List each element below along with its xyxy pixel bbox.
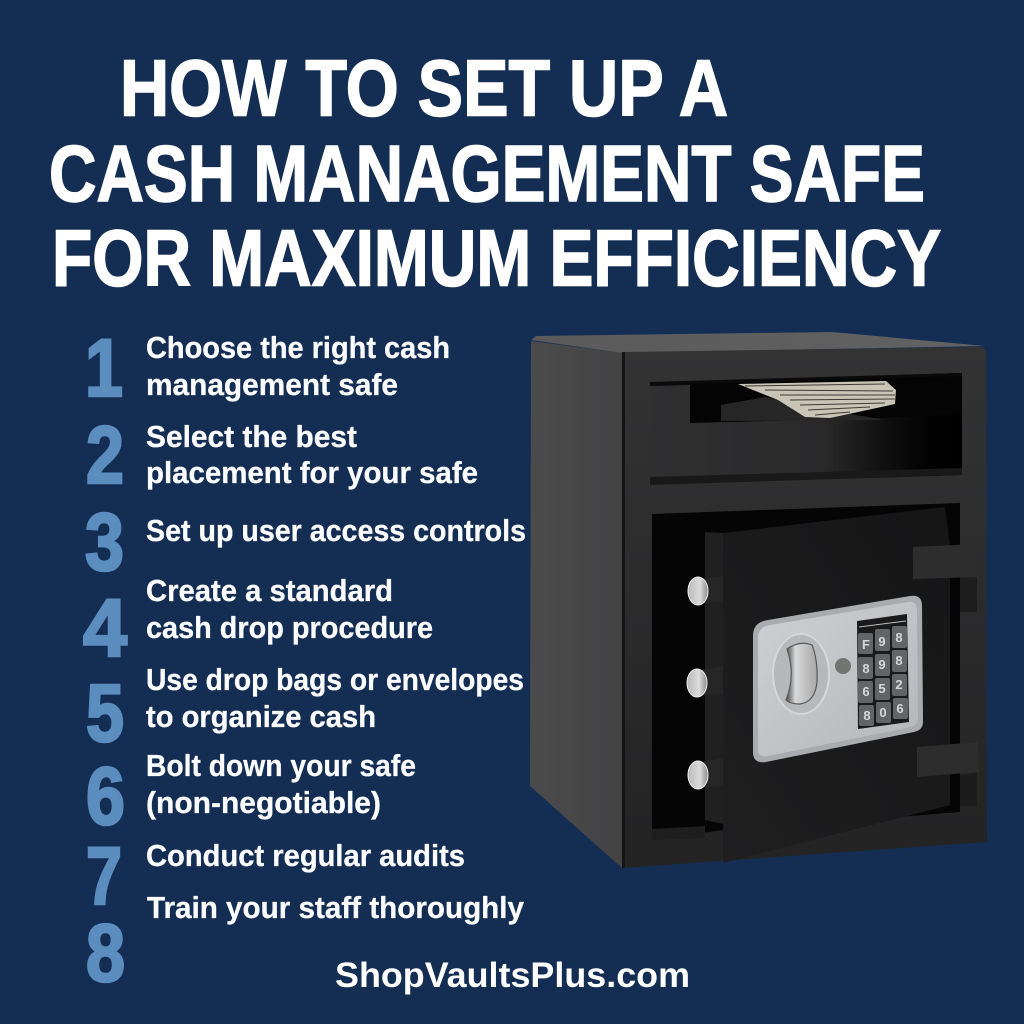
keypad key labels: 8 xyxy=(895,630,903,645)
step 5 xyxy=(86,663,524,759)
indicator light xyxy=(835,658,851,674)
step 5: Use drop bags or envelopes xyxy=(146,663,524,697)
door edge xyxy=(705,532,723,824)
keypad key labels: 8 xyxy=(862,661,870,676)
cash stack xyxy=(738,381,896,418)
step 1: Choose the right cash xyxy=(146,331,450,365)
locking bolt: top xyxy=(688,576,723,605)
electronic lock plate xyxy=(753,596,923,762)
step 2 xyxy=(86,410,478,501)
step 1: 1 xyxy=(85,323,123,414)
locking bolt: middle xyxy=(687,666,723,697)
illustration: cash management safe xyxy=(530,332,987,868)
keypad key labels: 9 xyxy=(878,634,886,649)
website footer: ShopVaultsPlus.com xyxy=(335,956,690,995)
handle recess xyxy=(773,634,829,714)
door xyxy=(723,507,950,863)
safe front face xyxy=(622,347,987,868)
numbered steps list xyxy=(83,323,526,999)
step 6 xyxy=(86,749,416,842)
keypad key labels: 5 xyxy=(878,681,886,696)
keypad key labels: 9 xyxy=(878,657,886,672)
title xyxy=(49,44,941,302)
keypad key labels: 6 xyxy=(896,701,904,716)
keypad key labels: 0 xyxy=(879,705,887,720)
step 3: Set up user access controls xyxy=(146,514,526,548)
step 8 xyxy=(86,891,524,999)
keypad key labels: 8 xyxy=(863,708,871,723)
locking bolt: bottom xyxy=(688,758,723,789)
lower opening xyxy=(652,503,960,840)
step 1 xyxy=(85,323,450,414)
step 8: 8 xyxy=(86,908,125,999)
keypad xyxy=(857,614,909,729)
step 2: placement for your safe xyxy=(146,456,478,490)
keypad key labels: 8 xyxy=(895,653,903,668)
slot opening xyxy=(690,376,962,423)
step 2: 2 xyxy=(86,410,124,501)
step 2: Select the best xyxy=(146,420,357,454)
step 3 xyxy=(85,497,526,588)
step 4: Create a standard xyxy=(146,574,393,608)
title: HOW TO SET UP A xyxy=(120,44,728,132)
keypad key labels xyxy=(862,630,904,723)
lower hinge xyxy=(917,742,979,777)
step 6: 6 xyxy=(86,751,125,842)
step 3: 3 xyxy=(85,497,124,588)
step 5: 5 xyxy=(86,668,124,759)
drop slot xyxy=(650,373,962,485)
safe top face xyxy=(531,332,985,353)
step 4: cash drop procedure xyxy=(146,611,433,645)
upper hinge xyxy=(913,544,977,579)
keypad key labels: 2 xyxy=(895,677,903,692)
step 7: Conduct regular audits xyxy=(146,839,465,873)
safe side face xyxy=(530,341,622,868)
step 7: 7 xyxy=(86,831,122,922)
step 8: Train your staff thoroughly xyxy=(147,891,524,925)
step 4: 4 xyxy=(83,583,127,674)
door hinge-side tabs xyxy=(960,548,977,612)
handle grip xyxy=(786,643,817,704)
step 6: Bolt down your safe xyxy=(146,749,416,783)
step 5: to organize cash xyxy=(146,700,376,734)
step 4 xyxy=(83,574,433,674)
keypad key labels: 6 xyxy=(862,684,870,699)
step 6: (non-negotiable) xyxy=(146,786,381,820)
keypad key labels: F xyxy=(862,637,870,652)
drop tray xyxy=(721,397,881,421)
step 1: management safe xyxy=(146,368,398,402)
step 7 xyxy=(86,831,465,922)
